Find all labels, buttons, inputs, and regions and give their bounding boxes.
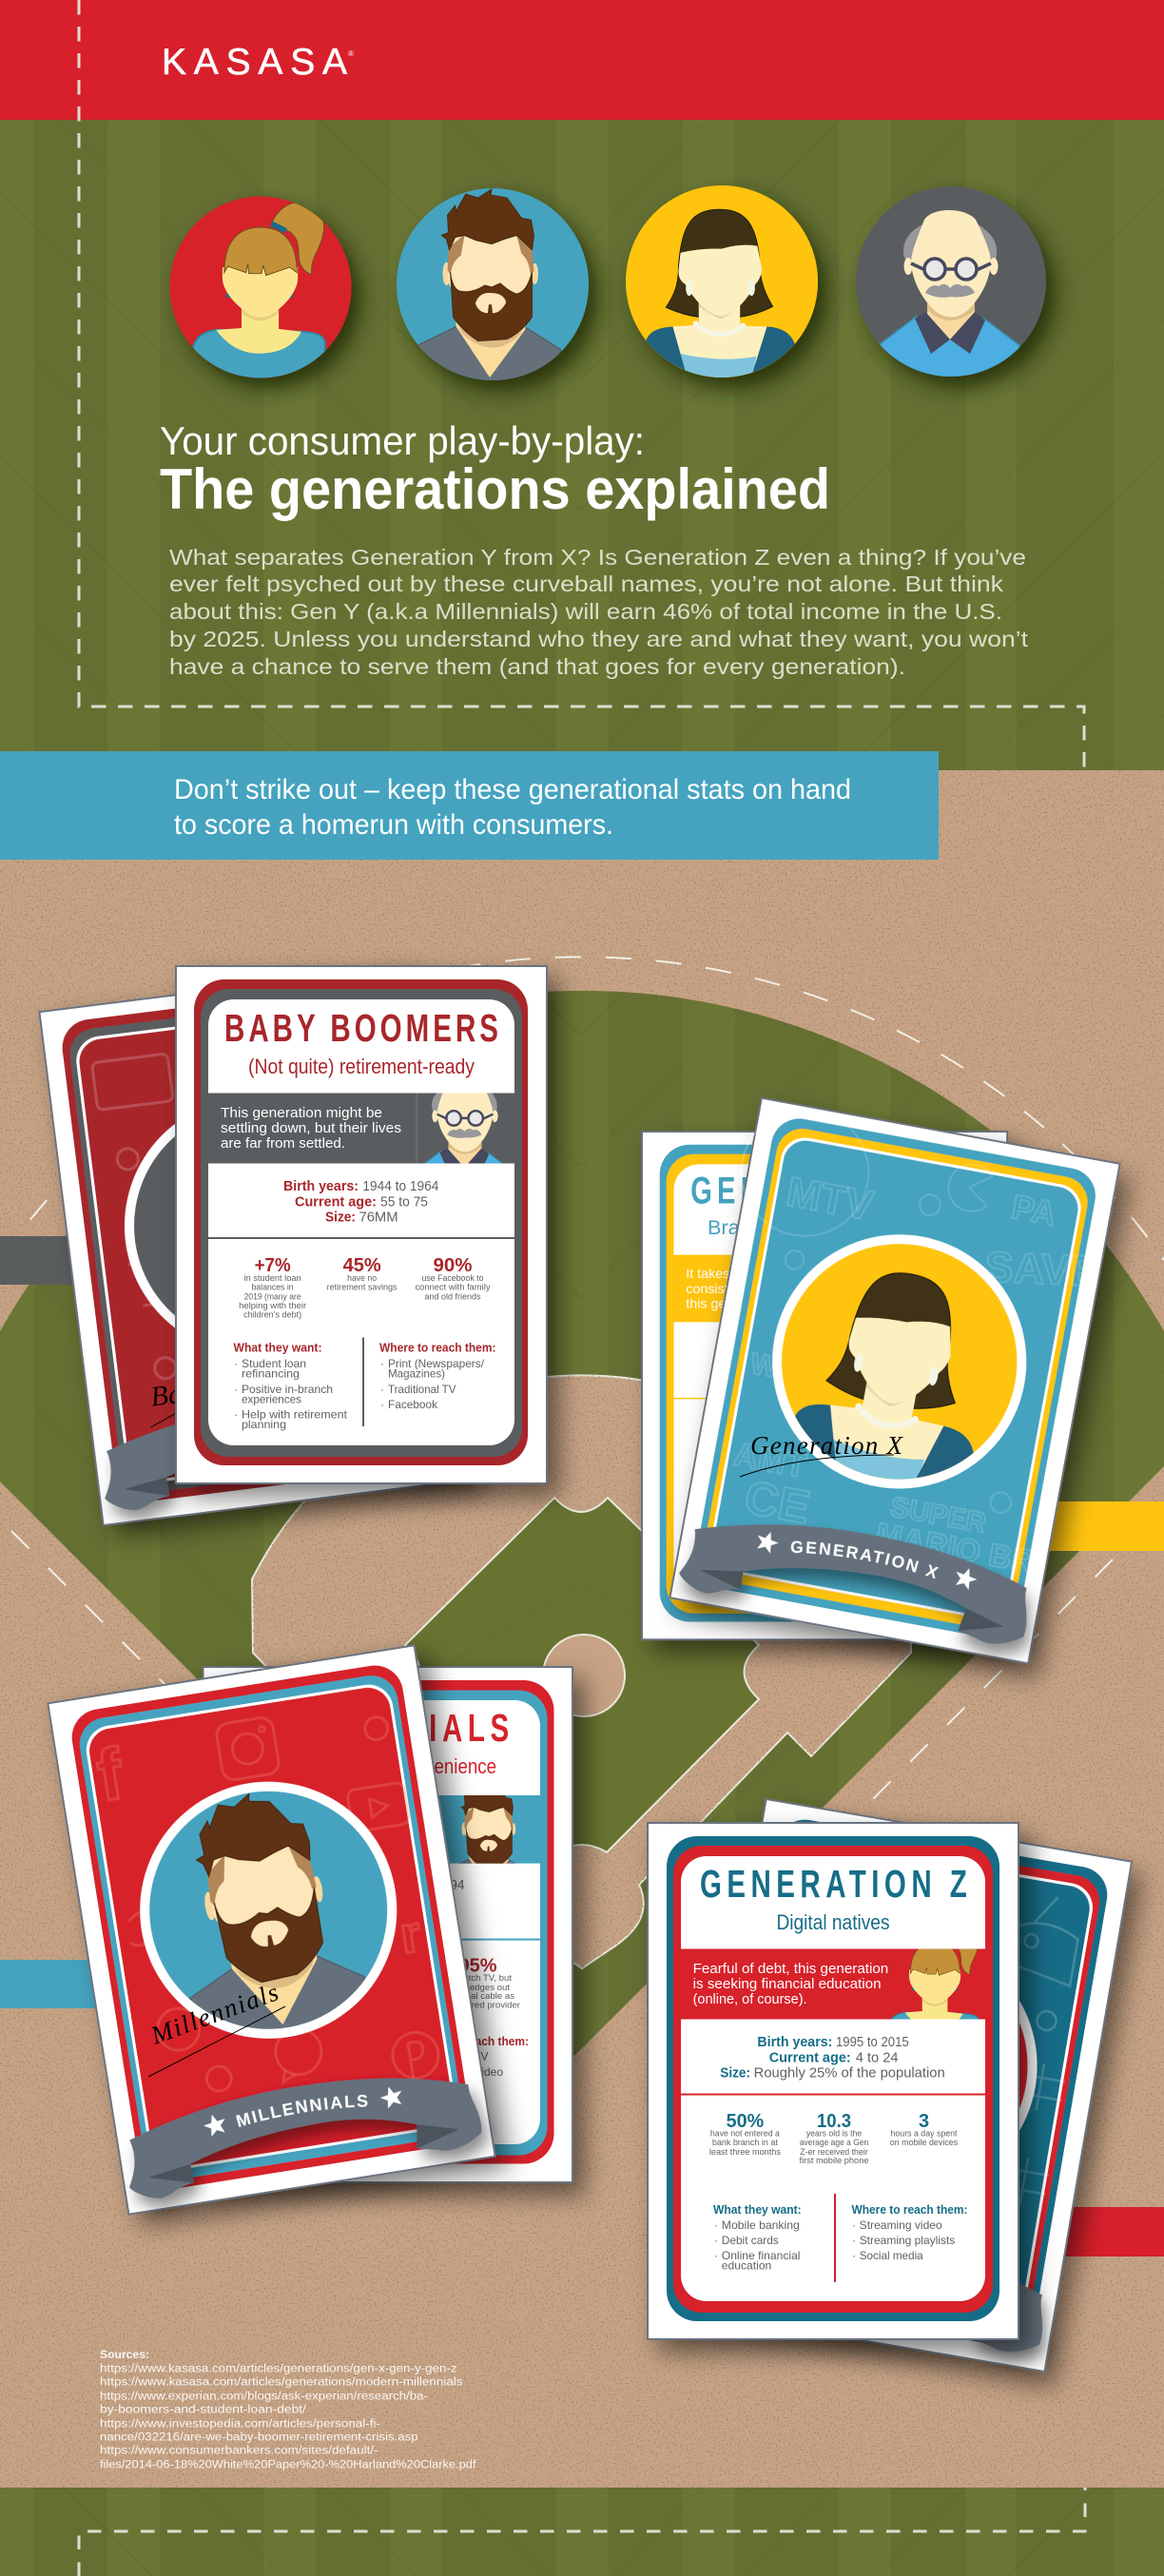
sources: https://www.experian.com/blogs/ask-experian/research/ba-: [100, 2391, 428, 2402]
list: where to reach them: Magazines): [388, 1367, 445, 1381]
list: what they want: What they want:: [713, 2202, 802, 2217]
accent bands: [0, 1236, 1164, 2256]
list: where to reach them: [379, 1341, 496, 1411]
avatar: Generation Z: [169, 196, 352, 382]
key facts: Size:: [325, 1210, 356, 1225]
list: what they want: Student loan: [242, 1357, 306, 1370]
info card: Generation Z: [648, 1823, 1018, 2339]
list: where to reach them: ·: [380, 1357, 384, 1370]
key facts: Roughly 25% of the population: [754, 2065, 945, 2081]
info card: Millennials: convenience: [397, 1754, 496, 1778]
baseball card: Generation X front art: WW: [747, 1346, 809, 1389]
baseball card: Baby Boomers front art: Baby Boomers: [148, 1361, 319, 1413]
sources: by-boomers-and-student-loan-debt/: [100, 2404, 307, 2415]
intro paragraph: by 2025. Unless you understand who they are and what they want, you won’t: [169, 627, 1029, 651]
stat: +7%: [239, 1255, 307, 1321]
info card: Millennials: watch TV, but: [456, 1973, 512, 1984]
key facts: 76MM: [359, 1210, 398, 1225]
list: where to reach them: Where to reach them:: [852, 2202, 968, 2217]
info card: Baby Boomers: [176, 966, 547, 1483]
description band with avatar: (online, of course).: [693, 1992, 807, 2007]
key facts: 55 to 75: [380, 1195, 428, 1211]
sources: https://www.consumerbankers.com/sites/default/-: [100, 2446, 378, 2457]
list: what they want: ·: [714, 2218, 718, 2232]
sources: files/2014-06-18%20White%20Paper%20-%20Harland%20Clarke.pdf: [100, 2459, 476, 2470]
avatar: Millennial: [397, 188, 589, 385]
baseball card: Generation X front art: MTV: [783, 1170, 877, 1230]
heading: (Not quite) retirement-ready: [248, 1055, 475, 1078]
info card: Millennials: traditional cable as: [438, 1991, 514, 2002]
stat: 50%: have not entered a: [710, 2128, 781, 2140]
list: what they want: ·: [234, 1357, 238, 1370]
heading: [700, 1862, 967, 1934]
stat: +7%: children’s debt): [243, 1310, 301, 1321]
stat: 45%: [327, 1255, 398, 1293]
list: what they want: Positive in-branch: [242, 1383, 333, 1396]
list: where to reach them: Print (Newspapers/: [388, 1357, 485, 1370]
baseball card: Generation X front art: [663, 1096, 1122, 1664]
stat: 50%: [709, 2111, 781, 2158]
description band with avatar: [208, 1076, 514, 1196]
key facts: Size:: [720, 2065, 750, 2081]
baseball card: Millennials front art: r: [397, 1905, 425, 1965]
stitched dashed outline top: [79, 0, 1084, 770]
info card: Generation X: this generation: [686, 1297, 775, 1312]
stat: 10.3: [799, 2111, 869, 2166]
avatar row: [169, 185, 1046, 385]
baseball diamond: infield skin: [252, 1375, 911, 1968]
info card: Millennials: Where to reach them:: [413, 2034, 529, 2048]
card stack: Millennials: [48, 1645, 572, 2215]
stat: +7%: 2019 (many are: [244, 1291, 301, 1303]
list: what they want: [713, 2202, 802, 2273]
signature: Generation X: Generation X: [750, 1431, 903, 1460]
info card: Generation X: Brand loyal: [708, 1215, 810, 1239]
stat: 3: on mobile devices: [890, 2138, 958, 2148]
list: what they want: planning: [242, 1418, 286, 1431]
key facts: 1995 to 2015: [836, 2035, 909, 2050]
list: what they want: Mobile banking: [722, 2218, 800, 2232]
list: what they want: ·: [714, 2249, 718, 2262]
foul line dashes: [11, 1531, 1113, 1816]
baseball card: Generation X front art: GENERATION X: [791, 1540, 940, 1579]
signature: Generation X: [740, 1431, 903, 1477]
heading: GENERATION Z: [700, 1862, 967, 1906]
stat: 50%: bank branch in at: [712, 2138, 778, 2148]
info card: Millennials: 1981 to 1994: [388, 1878, 464, 1893]
list: where to reach them: Streaming video: [860, 2218, 942, 2232]
list: what they want: What they want:: [234, 1341, 321, 1355]
intro paragraph: about this: Gen Y (a.k.a Millennials) will earn 46% of total income in the U.S.: [169, 599, 1002, 624]
info card: Generation X: GENERATION X: [690, 1170, 954, 1212]
key facts: 1944 to 1964: [362, 1179, 438, 1194]
baseball card: Generation X front art: SAVE: [984, 1242, 1099, 1295]
callout band: to score a homerun with consumers.: [174, 809, 613, 841]
sources: https://www.kasasa.com/articles/generations/modern-millennials: [100, 2376, 463, 2388]
list: where to reach them: Facebook: [388, 1398, 438, 1411]
info card: Millennials: MILLENNIALS: [267, 1706, 509, 1750]
card stack: Generation Z: [648, 1799, 1132, 2372]
list: what they want: [234, 1341, 348, 1431]
stat: 45%: 45%: [343, 1255, 381, 1276]
list: where to reach them: [852, 2202, 968, 2262]
stat: 3: [890, 2111, 958, 2148]
list: where to reach them: ·: [380, 1398, 384, 1411]
description band with avatar: Fearful of debt, this generation: [693, 1962, 888, 1977]
baseball card: Generation Z front art: [679, 1799, 1132, 2372]
info card: Generation X: [642, 1132, 1007, 1639]
list: where to reach them: ·: [380, 1383, 384, 1396]
stat: 45%: retirement savings: [327, 1283, 398, 1293]
key facts: [283, 1179, 438, 1225]
intro paragraph: What separates Generation Y from X? Is Generation Z even a thing? If you’ve: [169, 545, 1026, 570]
baseball card: Generation X front art: SUPER: [888, 1491, 988, 1540]
info card: Millennials: preferred provider: [448, 2001, 521, 2010]
stat: +7%: balances in: [252, 1283, 294, 1293]
stat: 10.3: 10.3: [817, 2111, 851, 2132]
info card: Millennials: video: [475, 2065, 503, 2079]
baseball card: Baby Boomers front art: [37, 962, 495, 1548]
card stack: Generation X: [635, 1097, 1143, 1692]
info card: Millennials: Netflix edges out: [442, 1983, 510, 1993]
info card: Generation X: It takes: [686, 1267, 729, 1282]
key facts: [720, 2035, 945, 2081]
stat: +7%: helping with their: [239, 1301, 307, 1311]
intro paragraph: have a chance to serve them (and that goes for every generation).: [169, 654, 905, 679]
stat: 3: 3: [919, 2111, 929, 2132]
key facts: 4 to 24: [856, 2051, 898, 2066]
stat: 90%: connect with family: [415, 1283, 491, 1293]
key facts: Birth years:: [757, 2035, 832, 2050]
logo: KASASA: ®: [348, 49, 354, 58]
stat: 10.3: Z-er received their: [800, 2147, 868, 2158]
baseball card: Generation X front art: PA: [1009, 1189, 1059, 1233]
sources: https://www.investopedia.com/articles/personal-fi-: [100, 2418, 380, 2430]
list: what they want: Help with retirement: [242, 1407, 348, 1421]
list: where to reach them: ·: [852, 2249, 856, 2262]
list: what they want: ·: [234, 1383, 238, 1396]
title: The generations explained: [160, 457, 830, 521]
info card: Generation X: consistent: [686, 1282, 747, 1297]
list: where to reach them: Streaming playlists: [860, 2234, 955, 2247]
sources: [100, 2350, 476, 2470]
list: what they want: refinancing: [242, 1367, 300, 1381]
stat: 50%: least three months: [709, 2147, 781, 2158]
avatar: Baby Boomer: [856, 186, 1046, 381]
stat: 90%: 90%: [434, 1255, 473, 1276]
intro paragraph: [169, 545, 1029, 679]
info card: Millennials: [204, 1667, 572, 2182]
title: [160, 418, 830, 521]
list: what they want: ·: [714, 2234, 718, 2247]
description band with avatar: is seeking financial education: [693, 1977, 882, 1992]
sources: https://www.kasasa.com/articles/generations/gen-x-gen-y-gen-z: [100, 2363, 457, 2374]
list: what they want: experiences: [242, 1392, 301, 1405]
title: Your consumer play-by-play:: [160, 418, 645, 463]
description band with avatar: are far from settled.: [221, 1136, 345, 1152]
stat: 50%: 50%: [727, 2111, 764, 2132]
intro paragraph: ever felt psyched out by these curveball names, you’re not alone. But think: [169, 571, 1004, 596]
baseball card: Millennials front art: [48, 1645, 495, 2215]
sources: Sources:: [100, 2350, 149, 2361]
list: what they want: ·: [234, 1407, 238, 1421]
heading: Digital natives: [776, 1910, 890, 1934]
key facts: Current age:: [295, 1195, 377, 1211]
avatar: Generation X: [626, 185, 818, 382]
list: where to reach them: Traditional TV: [388, 1383, 456, 1396]
stat: 90%: and old friends: [424, 1291, 481, 1303]
baseball card: Millennials front art: f: [91, 1733, 128, 1817]
description band with avatar: This generation might be: [221, 1106, 382, 1121]
baseball card: Generation X front art: AMT: [731, 1436, 809, 1485]
logo: KASASA: KASASA: [162, 42, 347, 83]
list: where to reach them: Where to reach them:: [379, 1341, 496, 1355]
stat: +7%: +7%: [255, 1255, 291, 1276]
list: what they want: Debit cards: [722, 2234, 779, 2247]
pitcher's mound: [543, 1635, 625, 1716]
header bar: [0, 0, 1164, 120]
baseball card: Generation Z front art: GENERATION Z: [799, 2240, 956, 2291]
description band with avatar: [681, 1926, 985, 2048]
callout band: [0, 751, 939, 860]
stat: +7%: in student loan: [244, 1273, 301, 1284]
key facts: Current age:: [769, 2051, 851, 2066]
card stack: Baby Boomers: [37, 957, 576, 1548]
heading: [224, 1006, 498, 1078]
baseball card: Generation X front art: MARIO BR: [873, 1517, 1038, 1580]
description band with avatar: settling down, but their lives: [221, 1121, 401, 1136]
signature: Millennials: Millennials: [146, 1978, 282, 2050]
outfield wall dashes: [0, 957, 1164, 1260]
stat: 90%: use Facebook to: [422, 1273, 483, 1284]
list: what they want: education: [722, 2259, 771, 2273]
key facts: Birth years:: [283, 1179, 359, 1194]
stat: 3: hours a day spent: [890, 2128, 958, 2140]
stat: 90%: [415, 1255, 491, 1303]
list: what they want: Online financial: [722, 2249, 801, 2262]
callout band: Don’t strike out – keep these generational stats on hand: [174, 774, 851, 805]
list: where to reach them: Social media: [860, 2249, 923, 2262]
baseball card: Baby Boomers front art: BABY BOOMERS: [196, 1404, 366, 1450]
stat: 10.3: average age a Gen: [800, 2138, 868, 2148]
baseball card: Generation X front art: CE: [741, 1472, 814, 1534]
heading: BABY BOOMERS: [224, 1006, 498, 1050]
info card: Millennials: 95%: [458, 1955, 497, 1976]
baseball diamond: inner grass: [405, 1498, 759, 1852]
list: where to reach them: ·: [852, 2234, 856, 2247]
stat: 10.3: first mobile phone: [799, 2156, 869, 2166]
list: where to reach them: ·: [852, 2218, 856, 2232]
baseball card: Millennials front art: MILLENNIALS: [236, 2094, 368, 2127]
stitched dashed outline bottom: [79, 2488, 1085, 2576]
info card: Millennials: TV: [474, 2050, 489, 2063]
stat: 45%: have no: [347, 1273, 377, 1284]
stat: 10.3: years old is the: [806, 2128, 862, 2140]
sources: nance/032216/are-we-baby-boomer-retirement-crisis.asp: [100, 2432, 418, 2444]
